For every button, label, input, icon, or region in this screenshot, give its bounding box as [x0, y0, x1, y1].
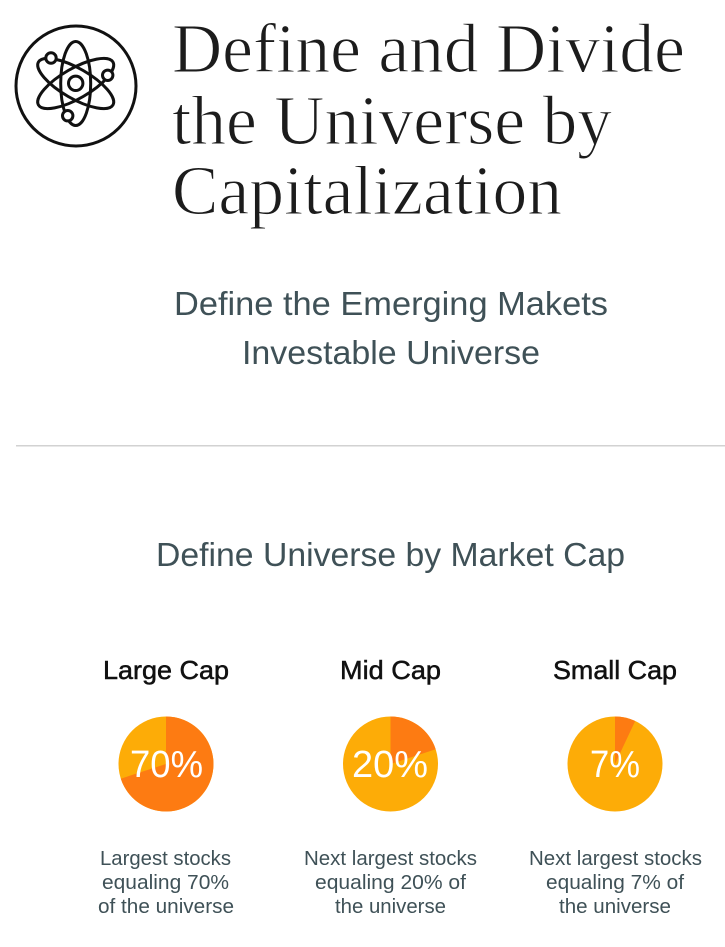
title: Define and Divide: [172, 11, 685, 88]
pie chart: 7%: 7%: [590, 744, 640, 786]
description: large cap: Largest stocks: [100, 848, 231, 870]
description: small cap: Next largest stocks: [529, 848, 702, 870]
pie chart: 70%: [118, 716, 214, 812]
panel: mid cap: [304, 655, 477, 918]
description: large cap: [98, 848, 234, 918]
pie chart: 7%: [568, 716, 662, 812]
description: small cap: the universe: [559, 896, 671, 918]
heading: small cap: Small Cap: [553, 655, 677, 685]
subtitle: Investable Universe: [242, 334, 540, 371]
description: mid cap: the universe: [335, 896, 446, 918]
description: mid cap: equaling 20% of: [315, 872, 466, 894]
subtitle: [174, 285, 608, 371]
pie chart: 20%: 20%: [352, 744, 428, 786]
icon: atom in circle: [16, 26, 136, 146]
heading: mid cap: Mid Cap: [340, 655, 441, 685]
heading: large cap: Large Cap: [103, 655, 229, 685]
title: [172, 11, 685, 230]
pie chart: 70%: 70%: [130, 744, 203, 786]
description: mid cap: Next largest stocks: [304, 848, 477, 870]
pie chart: 20%: [343, 716, 438, 812]
description: small cap: equaling 7% of: [546, 872, 684, 894]
description: large cap: equaling 70%: [102, 872, 229, 894]
title: the Universe by: [172, 83, 612, 160]
description: mid cap: [304, 848, 477, 918]
description: large cap: of the universe: [98, 896, 234, 918]
description: small cap: [529, 848, 702, 918]
section heading: Define Universe by Market Cap: [156, 536, 625, 573]
subtitle: Define the Emerging Makets: [174, 285, 608, 322]
panel: small cap: [529, 655, 702, 918]
title: Capitalization: [172, 153, 562, 230]
panel: large cap: [98, 655, 234, 918]
